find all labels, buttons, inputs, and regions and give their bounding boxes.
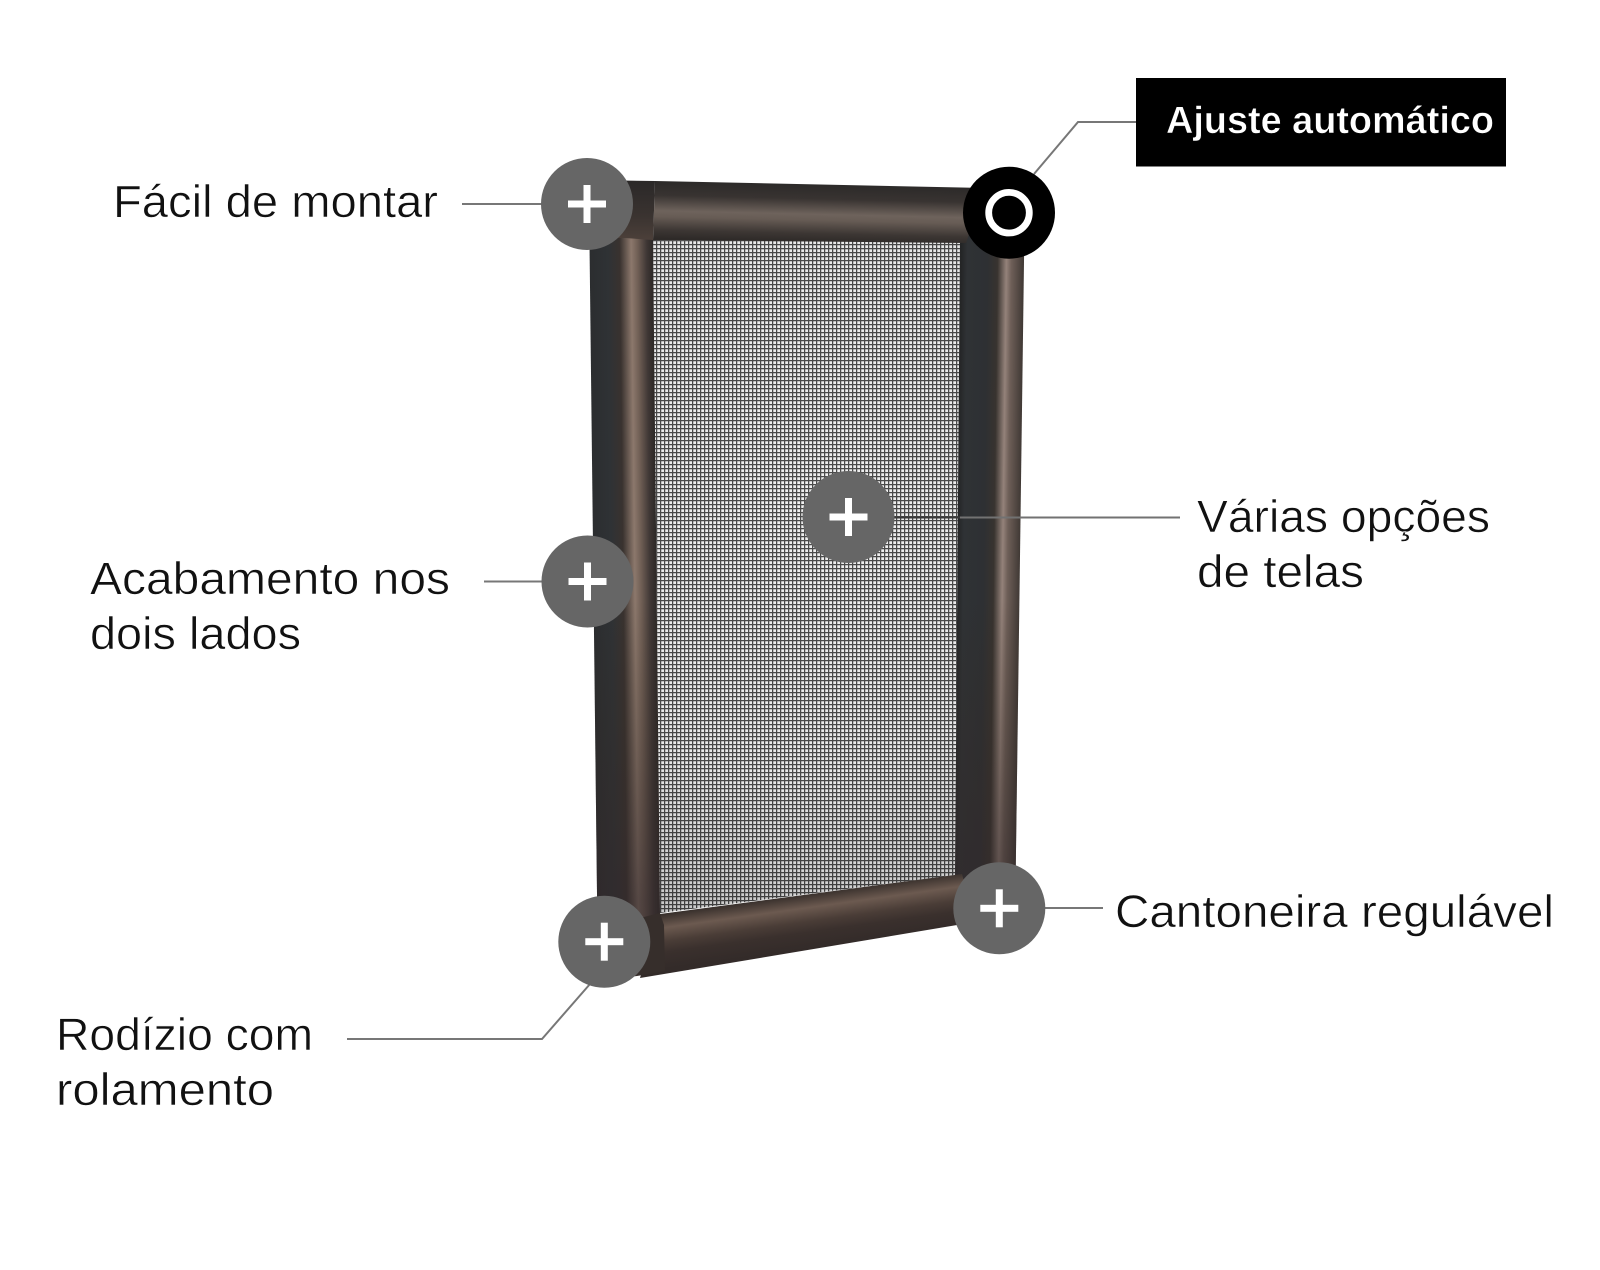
label box: Ajuste automático (1166, 100, 1494, 142)
mesh screen (653, 240, 960, 913)
marker: plus (802, 471, 894, 563)
frame: top bar (653, 181, 985, 243)
marker: active ring (963, 167, 1055, 259)
label box (1136, 78, 1506, 166)
marker: plus (953, 862, 1045, 954)
callout: Fácil de montar (113, 158, 633, 250)
callout: Acabamento nos dois lados (90, 536, 634, 659)
marker: plus (541, 158, 633, 250)
label: rolamento (56, 1064, 274, 1115)
label (1197, 491, 1490, 597)
leader line (347, 984, 590, 1039)
callout: Ajuste automático (active) (963, 78, 1506, 259)
marker: plus (558, 896, 650, 988)
frame: right bar (955, 188, 1025, 925)
label: de telas (1197, 546, 1364, 597)
label: Acabamento nos (90, 553, 450, 604)
callout: Rodízio com rolamento (56, 896, 650, 1115)
label: dois lados (90, 608, 301, 659)
label (90, 553, 450, 659)
label: Rodízio com (56, 1009, 313, 1060)
leader line (462, 203, 545, 205)
leader line (1034, 122, 1136, 174)
leader line (484, 580, 545, 582)
callout: Várias opções de telas (802, 471, 1490, 597)
label: Fácil de montar (113, 176, 438, 227)
frame: top-left corner (589, 180, 655, 240)
frame: bottom bar (640, 874, 975, 978)
leader line (1040, 907, 1103, 909)
leader line (890, 516, 1180, 518)
marker: plus (542, 536, 634, 628)
product: window screen frame (589, 180, 1025, 981)
frame: bottom-left corner (597, 913, 665, 981)
frame: left bar (589, 200, 660, 980)
label: Cantoneira regulável (1115, 886, 1554, 937)
label: Várias opções (1197, 491, 1490, 542)
callout: Cantoneira regulável (953, 862, 1554, 954)
label (56, 1009, 313, 1115)
